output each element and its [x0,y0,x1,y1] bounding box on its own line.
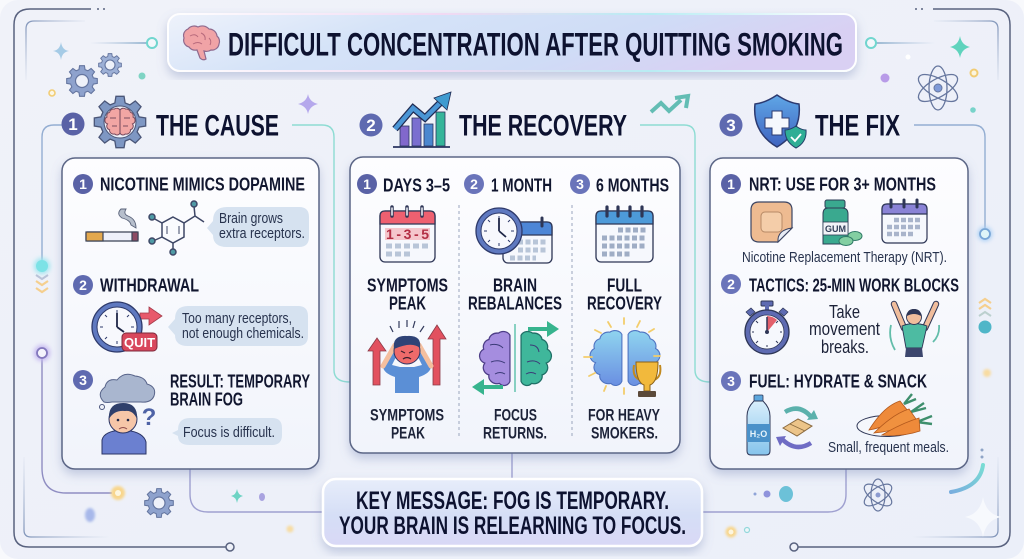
step 1 heading: 1 [79,176,87,192]
callout: focus is difficult [172,418,282,445]
icon: snack cycle arrows [776,409,818,447]
arrow decoration [651,96,688,112]
callout: too many receptors: not enough chemicals. [182,325,304,342]
icon: clock and calendar [476,208,552,263]
labels: stage outcomes: SYMPTOMS [370,406,444,424]
key message banner: KEY MESSAGE: FOG IS TEMPORARY. [356,487,669,515]
labels: stage outcomes [370,406,660,442]
step 3 badge: 3 [79,372,87,388]
connector: title right [866,38,935,48]
timeline headings: DAYS 3–5 [383,176,450,196]
icon: rising chart [393,92,451,147]
timeline headings: 1 [363,176,371,192]
icon: stressed person with rising arrows [368,320,446,393]
icon: clock with quit tag [92,302,162,352]
panel: the recovery [350,157,680,453]
text: take movement breaks: breaks. [821,337,869,357]
title banner [168,14,856,71]
step 3 heading [170,372,310,410]
labels: stage names: PEAK [389,294,426,314]
step badge 3 [720,114,742,136]
icon: cigarette [86,209,138,241]
star decoration [298,94,318,114]
icon: water bottle [747,395,770,455]
step 3 heading: FUEL: HYDRATE & SNACK [749,372,927,392]
section 2 header [360,92,627,147]
labels: stage names: FULL [607,276,642,296]
key message banner [323,479,702,546]
step 1 heading: NRT: USE FOR 3+ MONTHS [749,174,936,194]
callout: brain grows extra receptors: extra receptors. [219,225,305,242]
step 1 heading: NICOTINE MIMICS DOPAMINE [100,174,305,194]
text: nicotine replacement therapy: Nicotine Replacement Therapy (NRT). [742,249,947,266]
heading: the recovery: THE RECOVERY [459,110,627,142]
icon: person stretching [890,304,939,357]
panel: the cause [62,158,319,469]
step 2 heading: WITHDRAWAL [100,276,199,296]
labels: stage names: RECOVERY [587,294,662,314]
step badge 2: 2 [366,116,376,135]
labels: stage names: BRAIN [493,276,537,296]
labels: stage outcomes: SMOKERS. [591,424,658,442]
text: take movement breaks: Take [829,302,860,322]
timeline headings: 3 [576,176,584,192]
icon: water bottle: H₂O [750,429,767,439]
decorative icons: bottom left [85,486,294,532]
icon: rebalancing brain [472,321,559,395]
step 1 heading: 1 [727,176,735,192]
icon: person under fog cloud: ? [142,404,156,431]
decorative icons: top right [880,36,978,113]
callout: too many receptors [168,306,308,346]
section 1 header [62,96,279,148]
text: take movement breaks: movement [809,319,880,339]
icon: calendar days 1-3-5: 1-3-5 [386,226,429,242]
labels: stage names: SYMPTOMS [367,276,448,296]
step 2 heading [73,275,199,296]
step 2 heading: 2 [727,276,735,292]
step badge 2 [360,114,382,136]
icon: stopwatch [745,301,789,354]
labels: stage outcomes: FOCUS [494,406,537,424]
step 2 heading: 2 [79,277,87,293]
icon: brain [184,26,220,60]
labels: stage outcomes: RETURNS. [483,424,547,442]
labels: stage names: REBALANCES [468,294,562,314]
step 1 heading [721,174,936,194]
heading: the cause: THE CAUSE [156,110,279,142]
right rail nodes [951,227,1001,537]
panel: the fix [710,158,968,469]
heading: the fix: THE FIX [815,110,900,142]
step badge 3: 3 [726,116,736,135]
connector: title left [90,38,157,48]
icon: shield [755,95,806,148]
icon: calendar days 1-3-5 [380,207,435,262]
timeline headings: 6 MONTHS [596,176,669,196]
icon: glowing brain with trophy [584,318,660,397]
text: small frequent meals: Small, frequent meals. [828,439,949,456]
icon: gum bottle: GUM [825,224,846,234]
timeline headings: 2 [470,176,478,192]
labels: stage outcomes: PEAK [391,424,426,442]
step 3 heading [721,371,927,392]
icon: nicotine patch [751,202,792,242]
timeline headings: 1 MONTH [491,176,552,196]
labels: stage names [367,276,662,314]
decorative icons: bottom right [726,479,895,538]
callout: focus is difficult: Focus is difficult. [183,424,275,441]
left rail nodes [34,258,50,361]
text: take movement breaks [809,302,880,357]
icon: calendar three months [882,200,927,243]
step 3 heading: RESULT: TEMPORARY [170,372,310,392]
icon: calendar six months [596,207,653,262]
icon: molecule [149,201,204,255]
key message banner: YOUR BRAIN IS RELEARNING TO FOCUS. [339,512,686,540]
connectors between sections [42,125,985,512]
callout: brain grows extra receptors: Brain grows [219,210,283,227]
icon: gear with brain [94,96,146,148]
callout: too many receptors: Too many receptors, [182,310,292,327]
step 3 badge [73,370,93,390]
step badge 1: 1 [68,115,78,134]
callout: brain grows extra receptors [207,207,309,247]
icon: person under fog cloud [100,374,156,454]
icon: gum bottle [823,200,862,246]
step badge 1 [62,112,84,136]
timeline headings [357,174,669,196]
step 2 heading [721,274,959,296]
labels: stage outcomes: FOR HEAVY [588,406,660,424]
step 3 heading: BRAIN FOG [170,390,243,410]
decorative icons: top left [49,42,146,96]
icon: plate of carrots [857,394,932,436]
section 3 header [720,95,900,148]
icon: clock with quit tag: QUIT [124,335,155,350]
step 3 heading: 3 [727,373,735,389]
